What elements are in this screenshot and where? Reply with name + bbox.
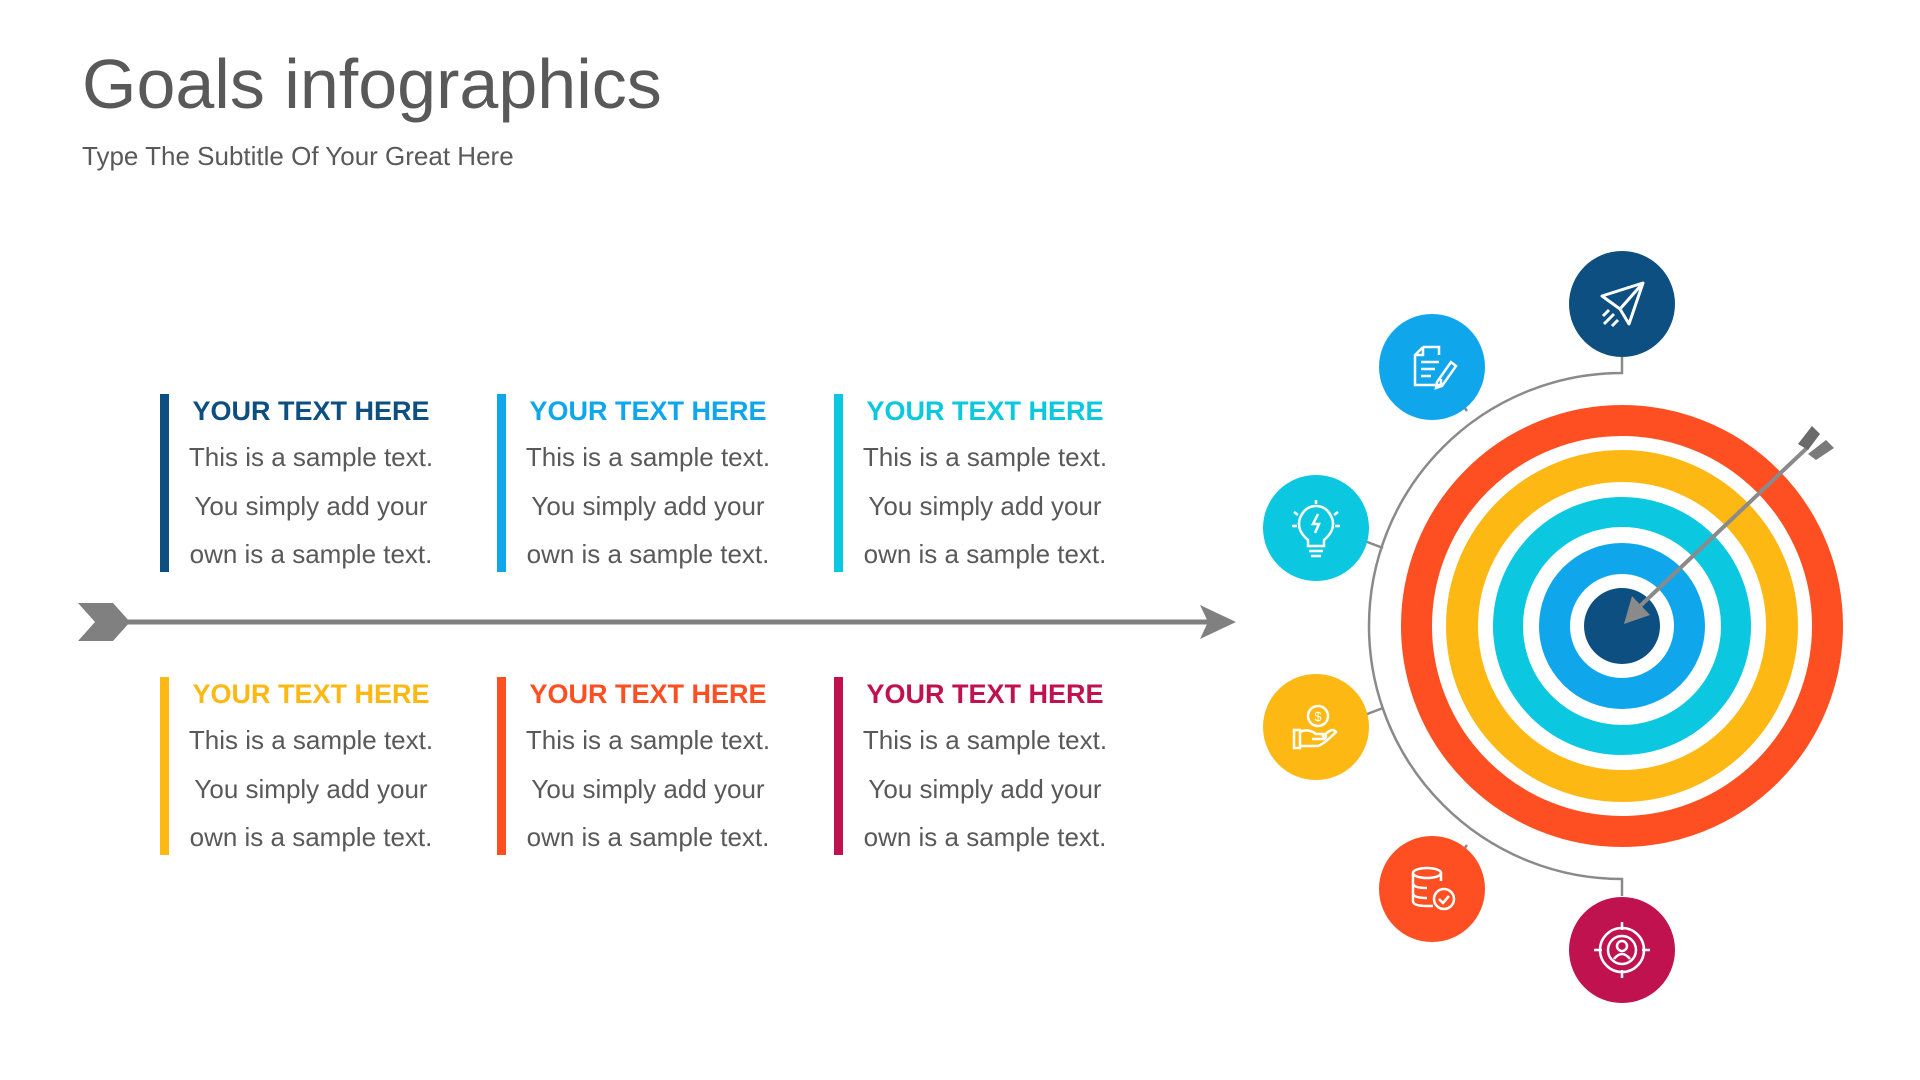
panel: top 2 [497,394,770,572]
panel: top 2: own is a sample text. [527,539,769,569]
panel: top 1: This is a sample text. [189,442,433,472]
panel: bottom 1: YOUR TEXT HERE [192,679,430,709]
panel: top 3: own is a sample text. [864,539,1106,569]
panel: bottom 2 [497,677,770,855]
panel: top 2: YOUR TEXT HERE [529,396,767,426]
panel: bottom 2: This is a sample text. [526,725,770,755]
icon: money hand [1263,674,1369,780]
panel: bottom 1 [160,677,433,855]
icon: money hand: $ [1314,709,1322,724]
icon: document [1379,314,1485,420]
panel: top 2: This is a sample text. [526,442,770,472]
panel: top 3: This is a sample text. [863,442,1107,472]
subtitle: Type The Subtitle Of Your Great Here [82,141,514,171]
panel: bottom 3: This is a sample text. [863,725,1107,755]
title: Goals infographics [82,45,662,123]
panel: bottom 1: own is a sample text. [190,822,432,852]
panel: bottom 3: YOUR TEXT HERE [866,679,1104,709]
icon: paper plane [1569,251,1675,357]
panel: bottom 2: YOUR TEXT HERE [529,679,767,709]
panel: top 1: own is a sample text. [190,539,432,569]
panel: bottom 1: You simply add your [194,774,428,804]
arrow: dart [1624,426,1834,624]
arrow: timeline [78,603,1236,641]
panel: top 2: You simply add your [531,490,765,520]
panel: top 3: You simply add your [868,490,1102,520]
panel: top 3 [834,394,1107,572]
icon: bulb [1263,475,1369,581]
icon: database check [1379,836,1485,942]
panel: top 1: YOUR TEXT HERE [192,396,430,426]
target [1416,420,1828,832]
panel: bottom 1: This is a sample text. [189,725,433,755]
panel: top 1 [160,394,433,572]
panel: top 3: YOUR TEXT HERE [866,396,1104,426]
panel: bottom 2: You simply add your [531,774,765,804]
panel: bottom 3: own is a sample text. [864,822,1106,852]
panel: bottom 3 [834,677,1107,855]
connector arc [1362,357,1622,896]
panel: bottom 3: You simply add your [868,774,1102,804]
panel: top 1: You simply add your [194,490,428,520]
icon: target person [1569,897,1675,1003]
panel: bottom 2: own is a sample text. [527,822,769,852]
